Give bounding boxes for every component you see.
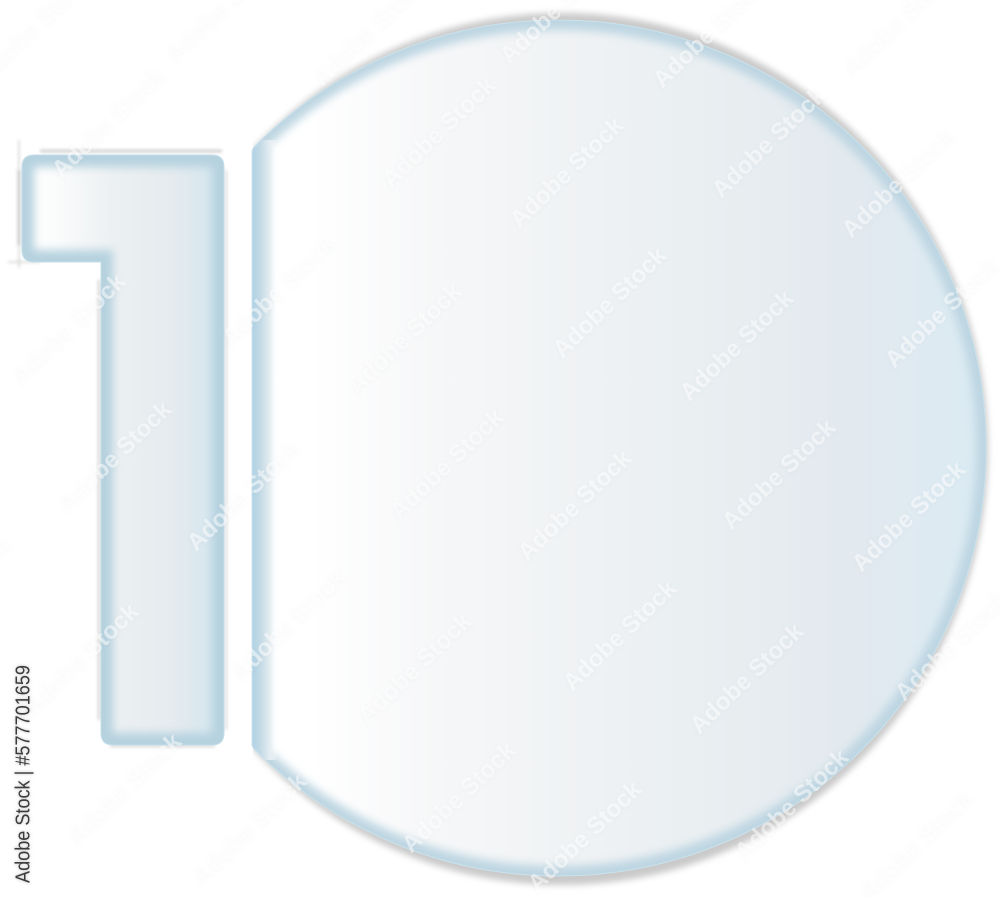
watermark text: Adobe Stock [343, 277, 467, 399]
watermark text: Adobe Stock [707, 81, 831, 203]
watermark text: Adobe Stock [47, 61, 171, 183]
watermark text: Adobe Stock [385, 403, 509, 525]
watermark text: Adobe Stock [717, 413, 841, 535]
watermark text: Adobe Stock [730, 743, 854, 865]
watermark text: Adobe Stock [675, 284, 799, 406]
watermark text: Adobe Stock [182, 434, 306, 556]
watermark text: Adobe Stock [397, 736, 521, 858]
watermark text: Adobe Stock [847, 455, 971, 577]
watermark text: Adobe Stock [63, 727, 187, 849]
digit one outline [22, 155, 224, 745]
watermark text: Adobe Stock [353, 607, 477, 729]
digit one [8, 140, 226, 746]
digit zero outline [252, 20, 986, 876]
watermark text: Adobe Stock [505, 111, 629, 233]
watermark text: Adobe Stock [217, 229, 341, 351]
watermark text: Adobe Stock [53, 395, 177, 517]
digit zero [252, 10, 991, 888]
watermark text: Adobe Stock [685, 617, 809, 739]
digit zero shadow [253, 10, 991, 888]
stock credit text: Adobe Stock | #577701659 [12, 665, 34, 883]
digit one body [22, 155, 224, 745]
watermark text: Adobe Stock [7, 267, 131, 389]
digit one inner rim [22, 155, 224, 745]
watermark text: Adobe Stock [513, 444, 637, 566]
digit zero inner rim [252, 20, 986, 876]
digit one shadow [8, 140, 226, 746]
watermark text: Adobe Stock [377, 71, 501, 193]
watermark text: Adobe Stock [548, 241, 672, 363]
watermark text: Adobe Stock [20, 597, 144, 719]
watermark text: Adobe Stock [188, 767, 312, 889]
watermark text: Adobe Stock [523, 775, 647, 897]
watermark text: Adobe Stock [837, 121, 961, 243]
digit zero body [252, 20, 986, 876]
watermark text: Adobe Stock [227, 563, 351, 685]
watermark text: Adobe Stock [558, 574, 682, 696]
